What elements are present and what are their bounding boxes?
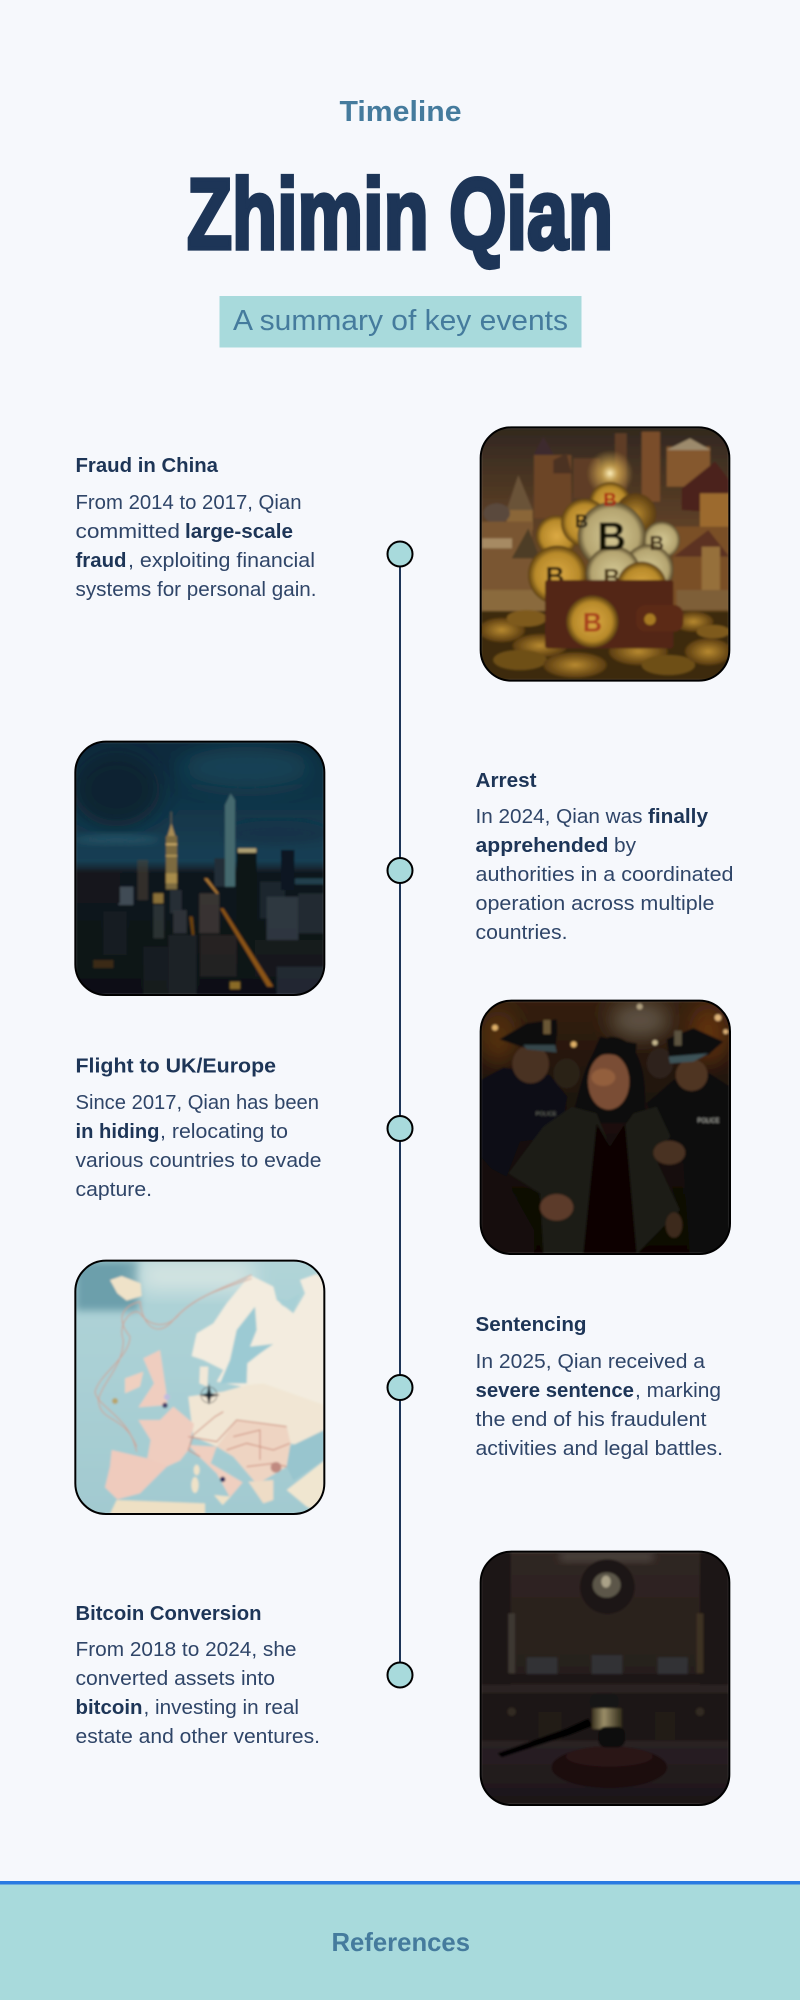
event: Sentencing: In 2025, Qian received a (476, 1351, 706, 1373)
small map markers (112, 1394, 281, 1482)
event: Flight to UK/Europe: , relocating to (160, 1121, 288, 1143)
coin pile: B (546, 561, 564, 591)
sky clouds (73, 747, 327, 844)
event: Bitcoin Conversion: From 2018 to 2024, she (76, 1639, 296, 1661)
left officer (481, 1019, 567, 1177)
marker 5 (388, 1662, 412, 1688)
North Africa (110, 1500, 205, 1514)
Ireland (125, 1372, 143, 1393)
event: Arrest: Arrest (476, 770, 537, 792)
event: Arrest (476, 770, 734, 944)
event: Sentencing (476, 1314, 723, 1460)
event: Fraud in China: From 2014 to 2017, Qian (76, 492, 302, 514)
subtitle badge (220, 296, 582, 348)
event: Sentencing: , marking (635, 1380, 721, 1402)
event: Bitcoin Conversion (76, 1603, 320, 1748)
event: Fraud in China: large-scale (185, 521, 293, 543)
event: Arrest: In 2024, Qian was (476, 806, 642, 828)
coin pile (528, 482, 680, 612)
event: Sentencing: activities and legal battles. (476, 1438, 723, 1460)
Baltic sea (220, 1307, 273, 1383)
wallet: B (583, 608, 602, 638)
event: Fraud in China: fraud (76, 550, 126, 572)
Balkans (217, 1420, 291, 1484)
event: Sentencing: Sentencing (476, 1314, 586, 1336)
coin pile: B (603, 489, 617, 510)
coin floor (478, 610, 732, 681)
Iceland (110, 1276, 142, 1301)
event: Arrest: operation across multiple (476, 893, 714, 915)
image: police arrest scene (480, 1001, 730, 1254)
arrested woman (508, 1037, 685, 1254)
Spain (105, 1450, 167, 1499)
event: Arrest: finally (648, 806, 709, 828)
left officer: POLICE (536, 1111, 557, 1117)
event: Bitcoin Conversion: , investing in real (144, 1697, 299, 1719)
event: Bitcoin Conversion: bitcoin (76, 1697, 142, 1719)
event: Sentencing: severe sentence (476, 1380, 634, 1402)
coin pile: B (603, 564, 620, 590)
low-rise city blocks (77, 860, 324, 995)
gavel (497, 1693, 667, 1788)
event: Flight to UK/Europe: various countries to evade (76, 1150, 322, 1172)
country borders (188, 1412, 290, 1467)
Mediterranean islands (191, 1465, 231, 1505)
wall seal (580, 1559, 635, 1614)
skyline towers (151, 793, 324, 906)
table (481, 1741, 729, 1805)
event: Arrest: countries. (476, 922, 568, 944)
coin pile: B (597, 515, 626, 559)
northern land (192, 1274, 324, 1407)
compass rose (199, 1383, 220, 1405)
judges' chairs (527, 1655, 688, 1674)
France (138, 1407, 194, 1467)
Greece (248, 1480, 273, 1503)
Denmark (199, 1367, 208, 1387)
event: Fraud in China: Fraud in China (76, 455, 219, 477)
right officer: POLICE (697, 1118, 719, 1124)
image: night city skyline (73, 742, 327, 995)
sea routes (95, 1275, 252, 1452)
event: Fraud in China: systems for personal gain. (76, 579, 316, 601)
judges' bench (481, 1674, 729, 1741)
footer band (0, 1881, 800, 2000)
buildings (482, 432, 729, 611)
event: Flight to UK/Europe: Since 2017, Qian has been (76, 1092, 319, 1114)
event: Sentencing: the end of his fraudulent (476, 1409, 707, 1431)
right officer (647, 1028, 730, 1254)
event: Arrest: by (614, 835, 636, 857)
event: Arrest: apprehended (476, 835, 608, 857)
image: courtroom gavel (481, 1552, 729, 1805)
event: Bitcoin Conversion: Bitcoin Conversion (76, 1603, 262, 1625)
Italy and Alps (188, 1445, 243, 1497)
sea shading (75, 1261, 253, 1311)
Turkey (287, 1461, 324, 1514)
subtitle badge: A summary of key events (233, 305, 568, 337)
Britain (138, 1350, 167, 1407)
wall panels (481, 1552, 729, 1685)
title: Zhimin Qian (187, 158, 613, 270)
flags (508, 1613, 703, 1673)
marker 1 (388, 542, 412, 566)
wallet (545, 580, 683, 648)
event: Fraud in China: , exploiting financial (128, 550, 315, 572)
foreground shadow figure (481, 1157, 534, 1254)
street background (480, 1002, 728, 1088)
event: Bitcoin Conversion: estate and other ventures. (76, 1726, 320, 1748)
white sea inlet (280, 1302, 286, 1306)
marker 4 (388, 1375, 412, 1400)
coin pile: B (575, 510, 588, 531)
event: Flight to UK/Europe (76, 1056, 322, 1201)
marker 3 (388, 1116, 412, 1141)
marker 2 (388, 858, 412, 883)
event: Bitcoin Conversion: converted assets into (76, 1668, 275, 1690)
references label: References (332, 1927, 470, 1957)
Black Sea (287, 1430, 324, 1481)
image: bitcoin wallet (478, 427, 732, 681)
timeline spine (388, 542, 412, 1688)
event: Arrest: authorities in a coordinated (476, 864, 734, 886)
central Europe (188, 1383, 324, 1447)
event: Fraud in China (76, 455, 316, 601)
eyebrow: Timeline: Timeline (340, 96, 462, 128)
event: Flight to UK/Europe: in hiding (76, 1121, 160, 1143)
coin pile: B (649, 533, 664, 555)
glowing avenue (93, 878, 273, 989)
image: map of Europe (75, 1261, 324, 1514)
event: Flight to UK/Europe: capture. (76, 1179, 152, 1201)
event: Fraud in China: committed (76, 521, 180, 543)
event: Flight to UK/Europe: Flight to UK/Europe (76, 1056, 276, 1078)
